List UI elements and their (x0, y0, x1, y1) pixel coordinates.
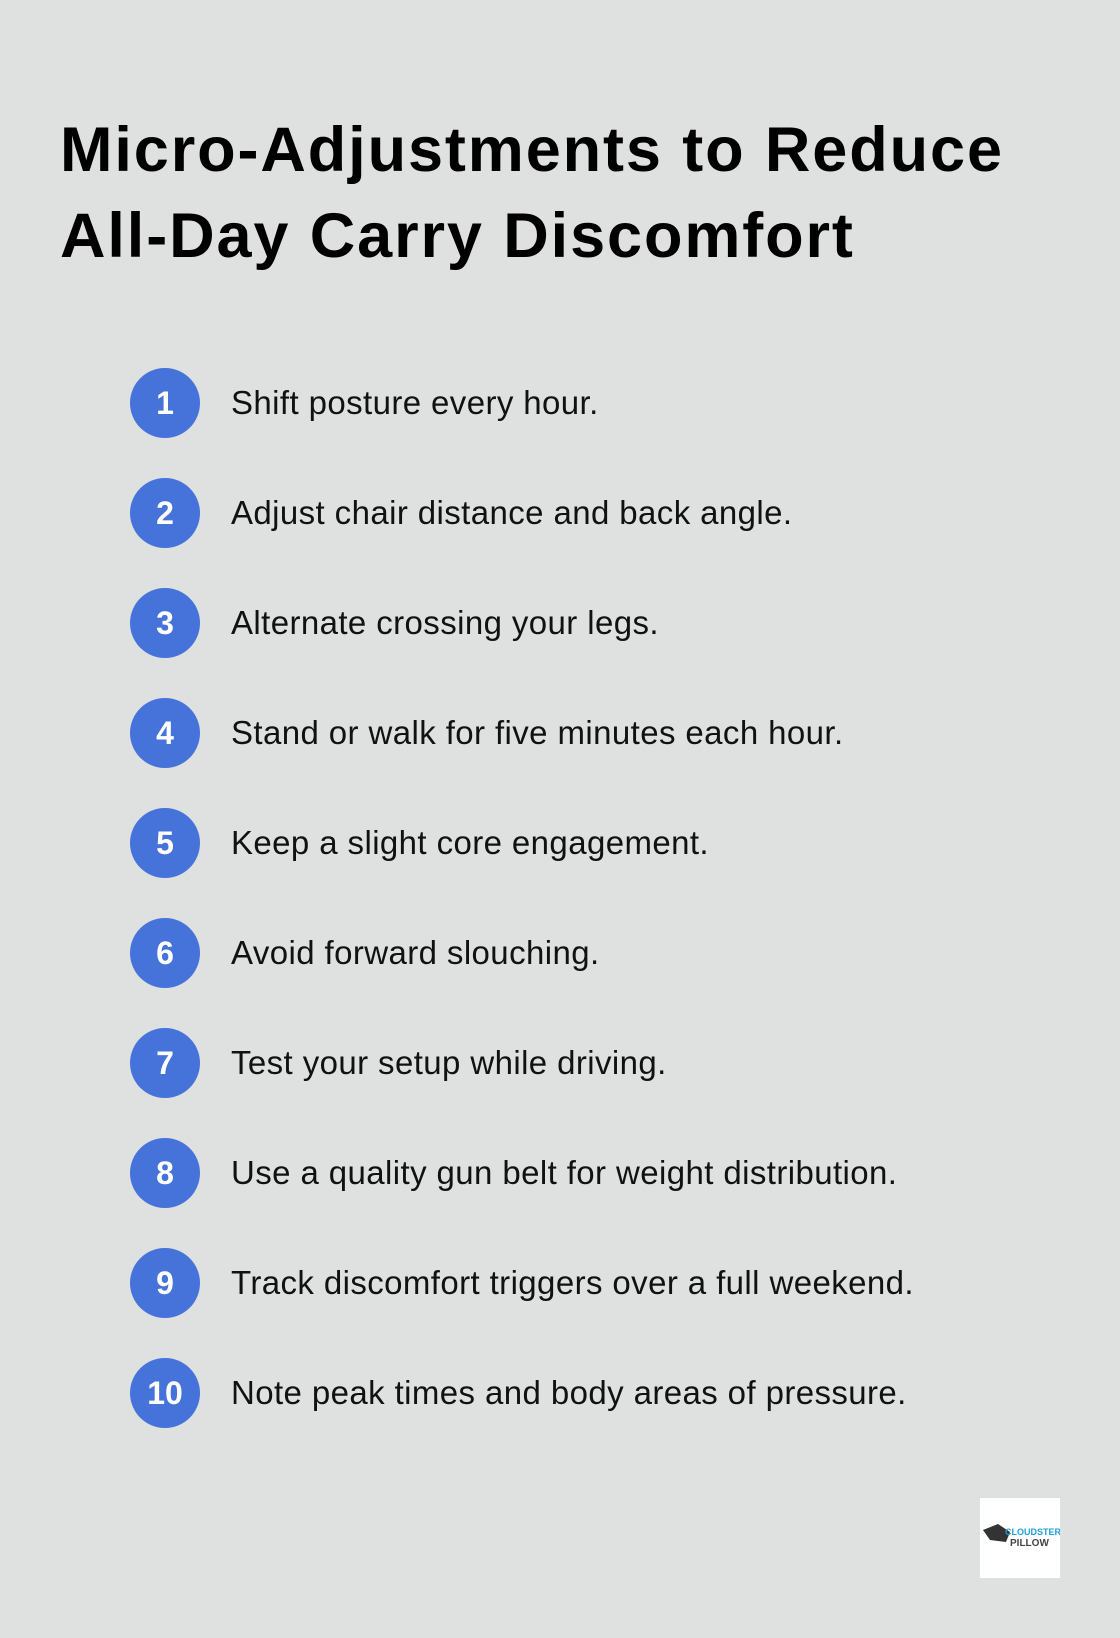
list item 9 (130, 1248, 914, 1318)
list item 8: Use a quality gun belt for weight distribution. (231, 1154, 897, 1191)
list item 1: 1 (156, 385, 174, 421)
list item 2: Adjust chair distance and back angle. (231, 494, 792, 531)
list item 6: 6 (156, 935, 174, 971)
list item 9: Track discomfort triggers over a full weekend. (231, 1264, 914, 1301)
list item 8 (130, 1138, 897, 1208)
list item 2 (130, 478, 792, 548)
list item 6 (130, 918, 600, 988)
list item 4: 4 (156, 715, 174, 751)
list item 5: Keep a slight core engagement. (231, 824, 709, 861)
title (60, 115, 1004, 271)
list item 5: 5 (156, 825, 174, 861)
title: Micro-Adjustments to Reduce (60, 115, 1004, 185)
list item 9: 9 (156, 1265, 174, 1301)
list item 7: Test your setup while driving. (231, 1044, 667, 1081)
title: All-Day Carry Discomfort (60, 201, 855, 271)
list item 3: 3 (156, 605, 174, 641)
list item 4: Stand or walk for five minutes each hour. (231, 714, 844, 751)
list item 10 (130, 1358, 907, 1428)
logo (980, 1498, 1060, 1578)
list item 8: 8 (156, 1155, 174, 1191)
list item 3 (130, 588, 659, 658)
list item 6: Avoid forward slouching. (231, 934, 600, 971)
list item 1: Shift posture every hour. (231, 384, 599, 421)
logo: CLOUDSTER (1005, 1527, 1060, 1537)
list item 3: Alternate crossing your legs. (231, 604, 659, 641)
list item 5 (130, 808, 709, 878)
list item 4 (130, 698, 844, 768)
list item 2: 2 (156, 495, 174, 531)
list item 7: 7 (156, 1045, 174, 1081)
logo: PILLOW (1010, 1538, 1049, 1549)
list item 10: Note peak times and body areas of pressure. (231, 1374, 907, 1411)
list item 10: 10 (147, 1375, 183, 1411)
list item 7 (130, 1028, 667, 1098)
list item 1 (130, 368, 599, 438)
